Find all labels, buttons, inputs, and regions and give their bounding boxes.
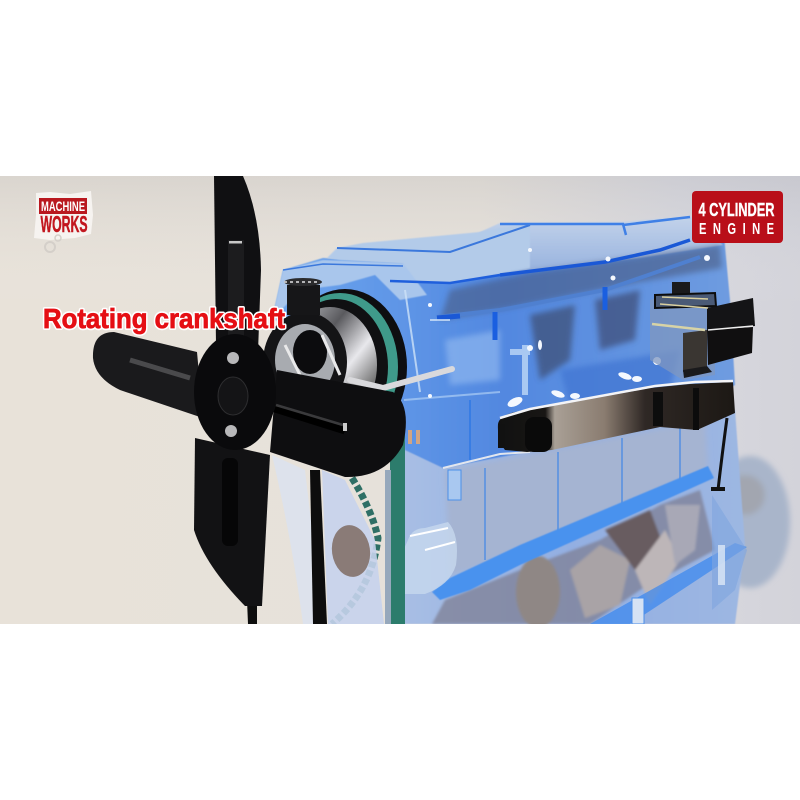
chrome exhaust manifold [498, 381, 735, 452]
top blade [214, 176, 261, 352]
rear lid top [480, 216, 723, 276]
grey panel wash above flange [445, 420, 708, 575]
rear wire [718, 418, 727, 490]
dark band under lid [440, 245, 722, 320]
chrome pulley and belt wheel [264, 289, 407, 400]
badge: 4 cylinder engine: ENGINE [699, 219, 781, 237]
bottom blade [194, 438, 270, 606]
blurred rear pulley [738, 454, 792, 590]
idler post [284, 278, 322, 315]
caption: rotating crankshaft: Rotating crankshaft [43, 303, 285, 334]
timing belt [332, 432, 405, 624]
upper block [272, 225, 735, 468]
white specks [428, 248, 710, 409]
first tier hood [276, 260, 427, 308]
white bracket and idler [272, 455, 384, 624]
front cylinder plug [405, 522, 457, 594]
black drive cable [310, 470, 327, 624]
lower crankcase [395, 410, 745, 624]
badge: 4 cylinder engine [692, 191, 783, 243]
infographic video frame [0, 176, 800, 624]
flange under upper block [443, 452, 530, 468]
hub bolts [227, 352, 239, 364]
left blade [93, 332, 203, 418]
engine: transparent blue body [272, 216, 747, 628]
logo: Machine Works: WORKS [40, 211, 88, 237]
fan: four black blades [93, 176, 406, 606]
logo: Machine Works: MACHINE [41, 198, 85, 214]
vertical ribs [485, 425, 680, 560]
orange reflection [408, 430, 412, 444]
oil pan flange [432, 466, 714, 600]
chrome bracket rod [350, 369, 452, 388]
caption: rotating crankshaft: Rotating crankshaft [43, 303, 285, 334]
right bracket [712, 495, 747, 610]
right blade [270, 370, 406, 477]
photo background [0, 176, 800, 624]
rear chrome exhaust fitting [650, 282, 755, 380]
logo: Machine Works [34, 191, 93, 252]
studs [448, 470, 461, 500]
front lid [327, 232, 530, 282]
internal smudges [445, 290, 680, 405]
hub [194, 334, 276, 450]
crankshaft seen through case [432, 490, 715, 628]
